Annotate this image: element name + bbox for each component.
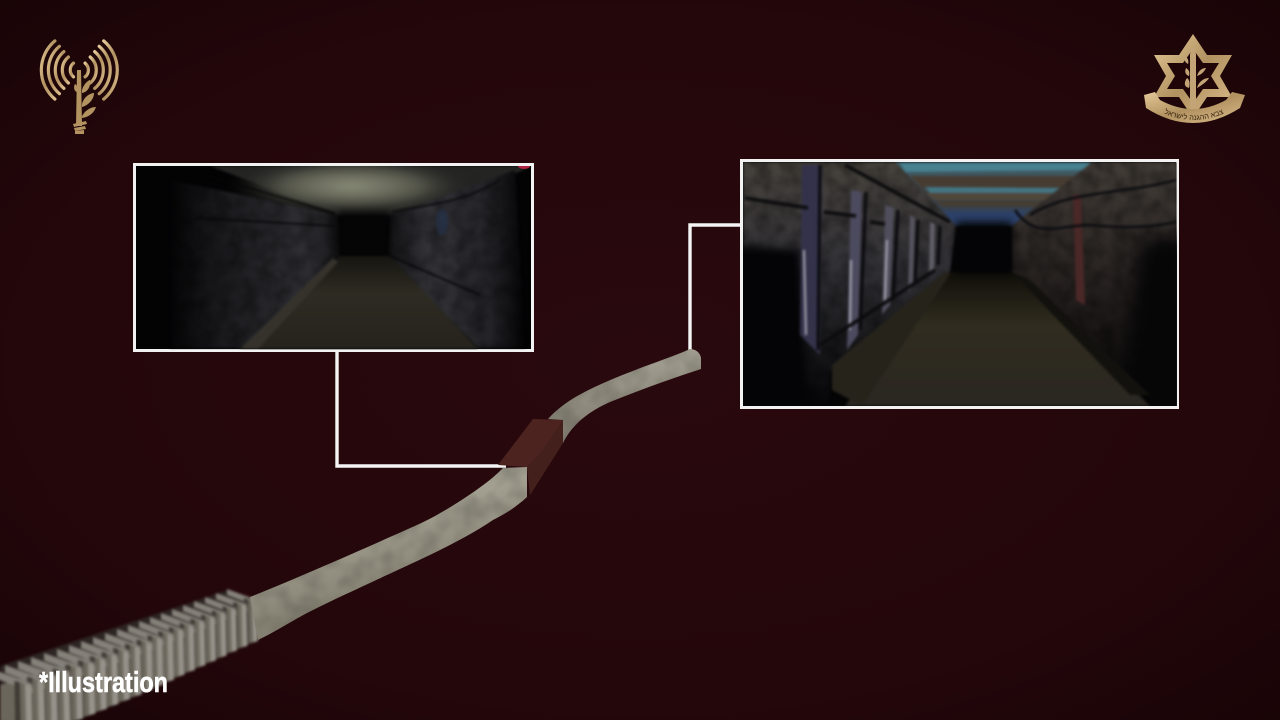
tunnel illustration	[0, 349, 701, 720]
right photo: left wall	[743, 162, 956, 406]
panel: right tunnel photo	[735, 160, 1190, 420]
left photo: red corner mark	[518, 166, 530, 169]
tunnel: lower concrete section	[250, 467, 527, 640]
tunnel: red brick section	[498, 419, 563, 495]
left photo: blue mark	[436, 209, 448, 235]
right photo: wall panels	[745, 165, 950, 355]
left photo: ceiling	[210, 166, 532, 215]
left photo: cracks	[228, 180, 499, 295]
logo: IDF star emblem	[1144, 34, 1245, 123]
emblem: stem and leaves	[73, 70, 96, 134]
right photo: red post	[1073, 195, 1085, 305]
sword and olive branch	[1184, 45, 1209, 110]
right photo: right drain shadow	[1012, 272, 1150, 395]
right photo: left shadow	[743, 242, 805, 383]
right photo: floor	[845, 272, 1150, 406]
left photo: floor	[250, 256, 478, 349]
ribbon text: צבא ההגנה לישראל	[1164, 108, 1224, 120]
right photo: right wall	[1012, 162, 1177, 406]
logo: radio antenna emblem	[41, 41, 117, 134]
star	[1154, 34, 1232, 118]
tunnel: upper concrete section	[548, 349, 701, 443]
right photo: ceiling beams	[900, 163, 1090, 224]
connector: left photo to tunnel	[337, 350, 506, 466]
connector: right photo to tunnel	[690, 225, 740, 350]
left photo: vanishing point	[337, 208, 390, 216]
left photo: left kerb	[240, 258, 338, 349]
ribbon	[1144, 92, 1245, 123]
right photo: ceiling	[895, 162, 1092, 226]
right photo: cables	[1015, 180, 1176, 229]
tunnel: ribbed section	[0, 589, 258, 720]
emblem: signal arcs	[41, 41, 117, 99]
left photo: ceiling light	[240, 166, 450, 211]
caption: illustration note: *Illustration	[39, 667, 168, 699]
left photo: left wall	[170, 180, 340, 348]
left photo: right wall	[388, 170, 525, 348]
right photo: right wall dark strip	[1130, 223, 1177, 406]
right photo: vanishing point	[956, 222, 1012, 274]
right photo: left ledge	[832, 272, 950, 406]
panel: left tunnel photo	[134, 156, 532, 350]
